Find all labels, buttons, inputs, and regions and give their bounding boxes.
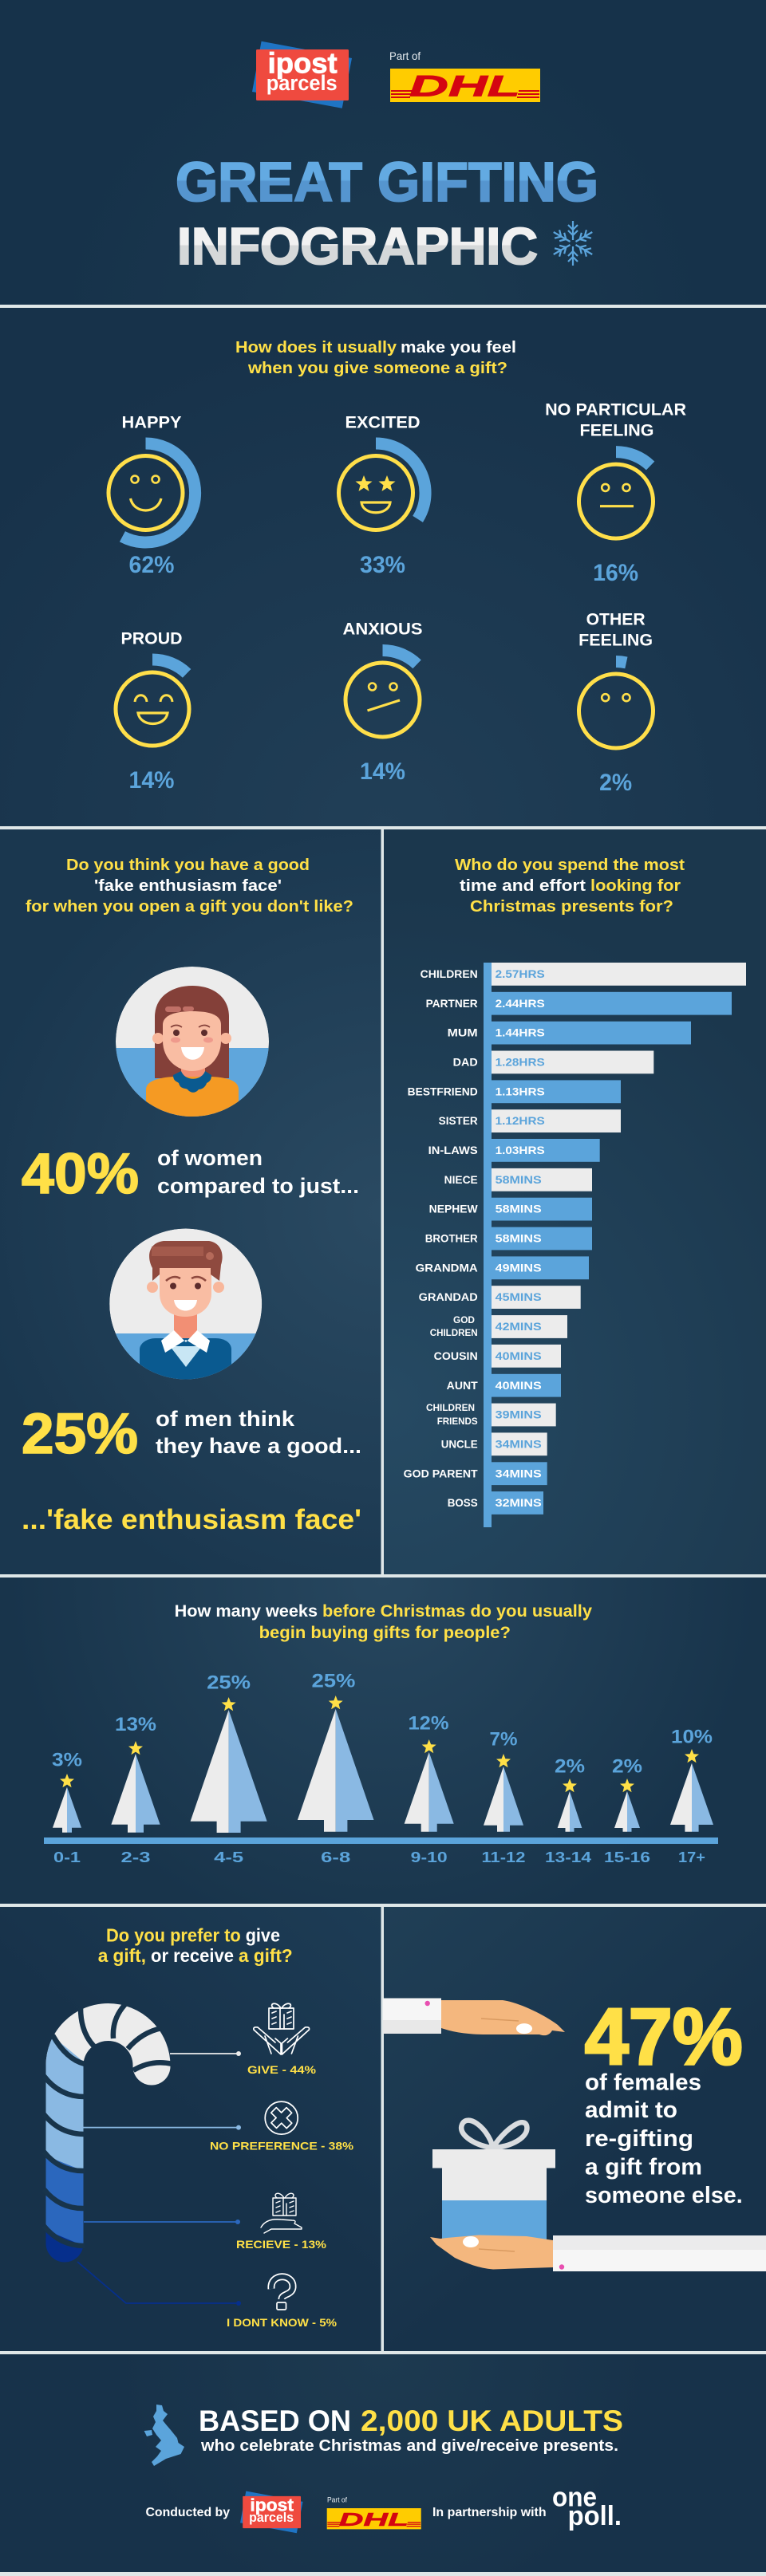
part of label: Part of [389, 49, 421, 62]
heading: give or receive question: a gift? [239, 1945, 293, 1966]
tree: 15-16 weeks: 2% [612, 1756, 642, 1777]
heading: feelings question: when you give someone a gift? [247, 360, 507, 377]
bar chart: 58MINS [496, 1173, 542, 1186]
feeling: no particular feeling [545, 400, 686, 586]
stat: 25% of men: of men think [156, 1407, 295, 1431]
bar chart: UNCLE [441, 1438, 478, 1450]
title: GREAT GIFTING [176, 151, 598, 213]
logo: ipost parcels: parcels [267, 71, 338, 95]
chart: tree bars [44, 1670, 718, 1865]
tree: 0-1 weeks: 3% [52, 1750, 82, 1771]
feeling: happy [109, 413, 195, 578]
connector lines [77, 2051, 241, 2306]
text: of females admit to re-gifting: of females [585, 2070, 701, 2096]
title [176, 151, 598, 275]
option: no preference 38%: NO PREFERENCE - 38% [210, 2140, 354, 2153]
feeling: other feeling: FEELING [578, 632, 653, 649]
text: of females admit to re-gifting [585, 2070, 743, 2208]
logo: ipost parcels small [240, 2491, 303, 2533]
feeling: proud [116, 630, 189, 794]
heading: weeks question [175, 1602, 592, 1642]
stat: 40% of women: of women [157, 1146, 263, 1170]
text: of females admit to re-gifting: re-gifting [585, 2126, 693, 2152]
bar chart: 1.28HRS [496, 1056, 545, 1069]
feeling: excited: EXCITED [345, 413, 420, 432]
feeling: excited [338, 413, 425, 578]
bar chart: 39MINS [496, 1408, 542, 1421]
text: survey base: 2,000 UK ADULTS [361, 2405, 623, 2437]
heading: give or receive question: give [246, 1925, 280, 1946]
tree: 15-16 weeks: 15-16 [604, 1849, 650, 1865]
logo: one poll: one [552, 2483, 597, 2513]
text: survey base [199, 2405, 623, 2455]
tree: 9-10 weeks [405, 1713, 454, 1865]
feeling: anxious: 14% [360, 758, 405, 785]
logo: one poll [552, 2483, 622, 2531]
tree: 9-10 weeks: 12% [409, 1713, 448, 1734]
bar chart: IN-LAWS [428, 1144, 478, 1156]
heading: fake enthusiasm question: 'fake enthusiasm face' [94, 877, 282, 895]
feeling: other feeling: 2% [599, 770, 632, 796]
bar chart: 34MINS [496, 1467, 542, 1479]
stat: 25% of men: they have a good... [156, 1434, 361, 1458]
bar chart: 1.03HRS [496, 1144, 545, 1156]
illustration: top hand [383, 1999, 565, 2035]
stat: 40% of women: compared to just... [157, 1174, 359, 1198]
option: give 44% [247, 2003, 317, 2076]
bar chart: GRANDAD [419, 1291, 478, 1303]
header logos [252, 41, 540, 108]
heading: fake enthusiasm question [26, 857, 353, 916]
tree: 2-3 weeks: 2-3 [121, 1849, 150, 1865]
logo: ipost parcels small: ipost [250, 2495, 294, 2515]
tree: 4-5 weeks [191, 1672, 267, 1865]
heading: time and effort question [455, 857, 685, 916]
bar chart: 1.44HRS [496, 1026, 545, 1039]
heading: time and effort question: time and effort [460, 877, 586, 895]
bar chart: 1.13HRS [496, 1085, 545, 1097]
heading: weeks question: How many weeks [175, 1602, 318, 1621]
feeling: proud: PROUD [121, 630, 182, 648]
feeling: other feeling [578, 611, 653, 796]
tree: 11-12 weeks [482, 1729, 525, 1865]
heading: time and effort question: Christmas presents for? [470, 898, 673, 916]
feeling: happy: 62% [129, 552, 174, 578]
logo: one poll: poll. [568, 2501, 622, 2531]
bar chart: 58MINS [496, 1232, 542, 1245]
heading: give or receive question: Do you prefer to [106, 1925, 241, 1946]
credits row: Conducted by [145, 2506, 230, 2519]
bar chart: CHILDREN [426, 1402, 475, 1413]
bar chart: CHILDREN [421, 968, 478, 980]
logo: DHL: DHL [409, 70, 520, 103]
bar chart: PARTNER [426, 998, 478, 1010]
heading: feelings question [235, 339, 516, 377]
feeling: no particular feeling: 16% [593, 560, 638, 586]
callout: fake enthusiasm face: ...'fake enthusiasm face' [22, 1504, 361, 1535]
tree: 13-14 weeks [545, 1756, 591, 1865]
bar chart: GOD PARENT [404, 1467, 478, 1479]
bar chart: CHILDREN [430, 1327, 478, 1338]
bar chart: SISTER [439, 1115, 478, 1127]
option: receive 13% [236, 2193, 327, 2251]
bar chart: 40MINS [496, 1379, 542, 1392]
heading: feelings question: make you feel [401, 339, 516, 356]
illustration: man [109, 1228, 263, 1383]
bar chart: 2.57HRS [496, 967, 545, 980]
heading: give or receive question: a gift, [98, 1945, 146, 1966]
heading: time and effort question: looking for [590, 877, 681, 895]
illustration: woman [116, 967, 269, 1120]
bar chart: 34MINS [496, 1437, 542, 1450]
tree: 9-10 weeks: 9-10 [411, 1849, 448, 1865]
bar chart: BOSS [448, 1497, 478, 1509]
stat: 25% of men: 25% [22, 1403, 138, 1466]
bar chart: 49MINS [496, 1261, 542, 1274]
bar chart: 32MINS [496, 1496, 542, 1509]
panel: feelings [109, 339, 686, 796]
title: INFOGRAPHIC [177, 217, 538, 275]
tree: 13-14 weeks: 13-14 [545, 1849, 591, 1865]
feeling: other feeling: OTHER [586, 611, 646, 628]
tree: 17+ weeks: 17+ [678, 1849, 705, 1865]
bar chart: GRANDMA [416, 1262, 478, 1274]
heading: fake enthusiasm question: Do you think you have a good [66, 857, 310, 874]
heading: give or receive question: or receive [151, 1945, 234, 1966]
heading: fake enthusiasm question: for when you open a gift you don't like? [26, 898, 353, 916]
panel: footer [144, 2405, 623, 2533]
feeling: happy: HAPPY [121, 413, 182, 432]
icon: snowflake [551, 221, 594, 266]
tree: 17+ weeks [670, 1726, 713, 1865]
stat: 25% of men [22, 1403, 361, 1466]
heading: weeks question: before Christmas do you usually [322, 1602, 592, 1621]
bar chart: MUM [448, 1027, 478, 1039]
tree: 11-12 weeks: 7% [490, 1729, 517, 1750]
tree: 17+ weeks: 10% [671, 1726, 713, 1748]
option: no preference 38% [210, 2101, 354, 2153]
tree: 4-5 weeks: 25% [207, 1672, 251, 1694]
panel: time spent by recipient [404, 857, 746, 1527]
bar chart: GOD [453, 1314, 475, 1325]
illustration: gift box [432, 2121, 555, 2240]
option: give 44%: GIVE - 44% [247, 2063, 317, 2076]
feeling: proud: 14% [129, 767, 174, 794]
tree: 0-1 weeks: 0-1 [53, 1849, 81, 1865]
text: of females admit to re-gifting: someone else. [585, 2183, 743, 2208]
bar chart: 40MINS [496, 1349, 542, 1362]
option: don't know 5%: I DONT KNOW - 5% [227, 2316, 338, 2329]
tree: 2-3 weeks: 13% [115, 1714, 156, 1735]
tree: 4-5 weeks: 4-5 [214, 1849, 243, 1865]
logo: ipost parcels small: parcels [249, 2510, 294, 2525]
stat: 40% of women: 40% [22, 1143, 139, 1206]
bar chart: BROTHER [425, 1233, 478, 1245]
bar chart: 45MINS [496, 1290, 542, 1303]
tree: 6-8 weeks: 6-8 [321, 1849, 350, 1865]
stat: 40% of women [22, 1143, 359, 1206]
heading: give or receive question [98, 1925, 293, 1966]
chart: candy cane [46, 2003, 171, 2262]
bar chart: DAD [453, 1056, 478, 1069]
option: don't know 5% [227, 2277, 338, 2329]
logo: DHL small: DHL [339, 2509, 409, 2530]
tree: 0-1 weeks [52, 1750, 82, 1865]
panel: weeks before Christmas [44, 1602, 718, 1865]
bar chart: NIECE [444, 1174, 478, 1186]
panel: fake enthusiasm face [22, 857, 361, 1535]
part of label small: Part of [327, 2496, 347, 2504]
tree: 11-12 weeks: 11-12 [482, 1849, 525, 1865]
tree: 15-16 weeks [604, 1756, 650, 1865]
heading: feelings question: How does it usually [235, 339, 397, 356]
bar chart: NEPHEW [429, 1203, 478, 1215]
panel: give or receive [40, 1925, 354, 2329]
illustration: bottom hand [430, 2235, 766, 2271]
text: of females admit to re-gifting: a gift from [585, 2155, 702, 2180]
logo: DHL [390, 69, 540, 103]
bar chart: BESTFRIEND [408, 1085, 478, 1097]
bar chart: 58MINS [496, 1203, 542, 1215]
heading: time and effort question: Who do you spend the most [455, 857, 685, 874]
bar chart: 2.44HRS [496, 997, 545, 1010]
feeling: anxious: ANXIOUS [343, 620, 423, 638]
heading: weeks question: begin buying gifts for people? [259, 1624, 511, 1642]
tree: 2-3 weeks [111, 1714, 160, 1865]
credits row [145, 2483, 622, 2533]
icon: UK map [144, 2405, 184, 2466]
logo: DHL small [327, 2508, 421, 2530]
text: survey base: who celebrate Christmas and give/receive presents. [200, 2437, 618, 2455]
stat: 47%: 47% [585, 1992, 743, 2082]
logo: ipost parcels: ipost [268, 47, 338, 80]
option: receive 13%: RECIEVE - 13% [236, 2238, 327, 2251]
feeling: excited: 33% [360, 552, 405, 578]
tree: 6-8 weeks: 25% [311, 1670, 356, 1692]
feeling: no particular feeling: NO PARTICULAR [545, 400, 686, 419]
text: in partnership with: In partnership with [432, 2506, 547, 2519]
feeling: no particular feeling: FEELING [579, 421, 654, 440]
panel: re-gifting [383, 1992, 766, 2271]
bar chart: FRIENDS [437, 1416, 478, 1427]
feeling: anxious [343, 620, 423, 785]
bar chart: AUNT [447, 1380, 478, 1392]
logo: ipost parcels [252, 41, 352, 108]
bar chart: 1.12HRS [496, 1114, 545, 1127]
bar chart [404, 963, 746, 1527]
text: of females admit to re-gifting: admit to [585, 2097, 677, 2123]
bar chart: 42MINS [496, 1320, 542, 1333]
tree: 6-8 weeks [298, 1670, 373, 1865]
bar chart: COUSIN [434, 1350, 478, 1362]
tree: 13-14 weeks: 2% [555, 1756, 585, 1777]
text: survey base: BASED ON [199, 2405, 351, 2437]
